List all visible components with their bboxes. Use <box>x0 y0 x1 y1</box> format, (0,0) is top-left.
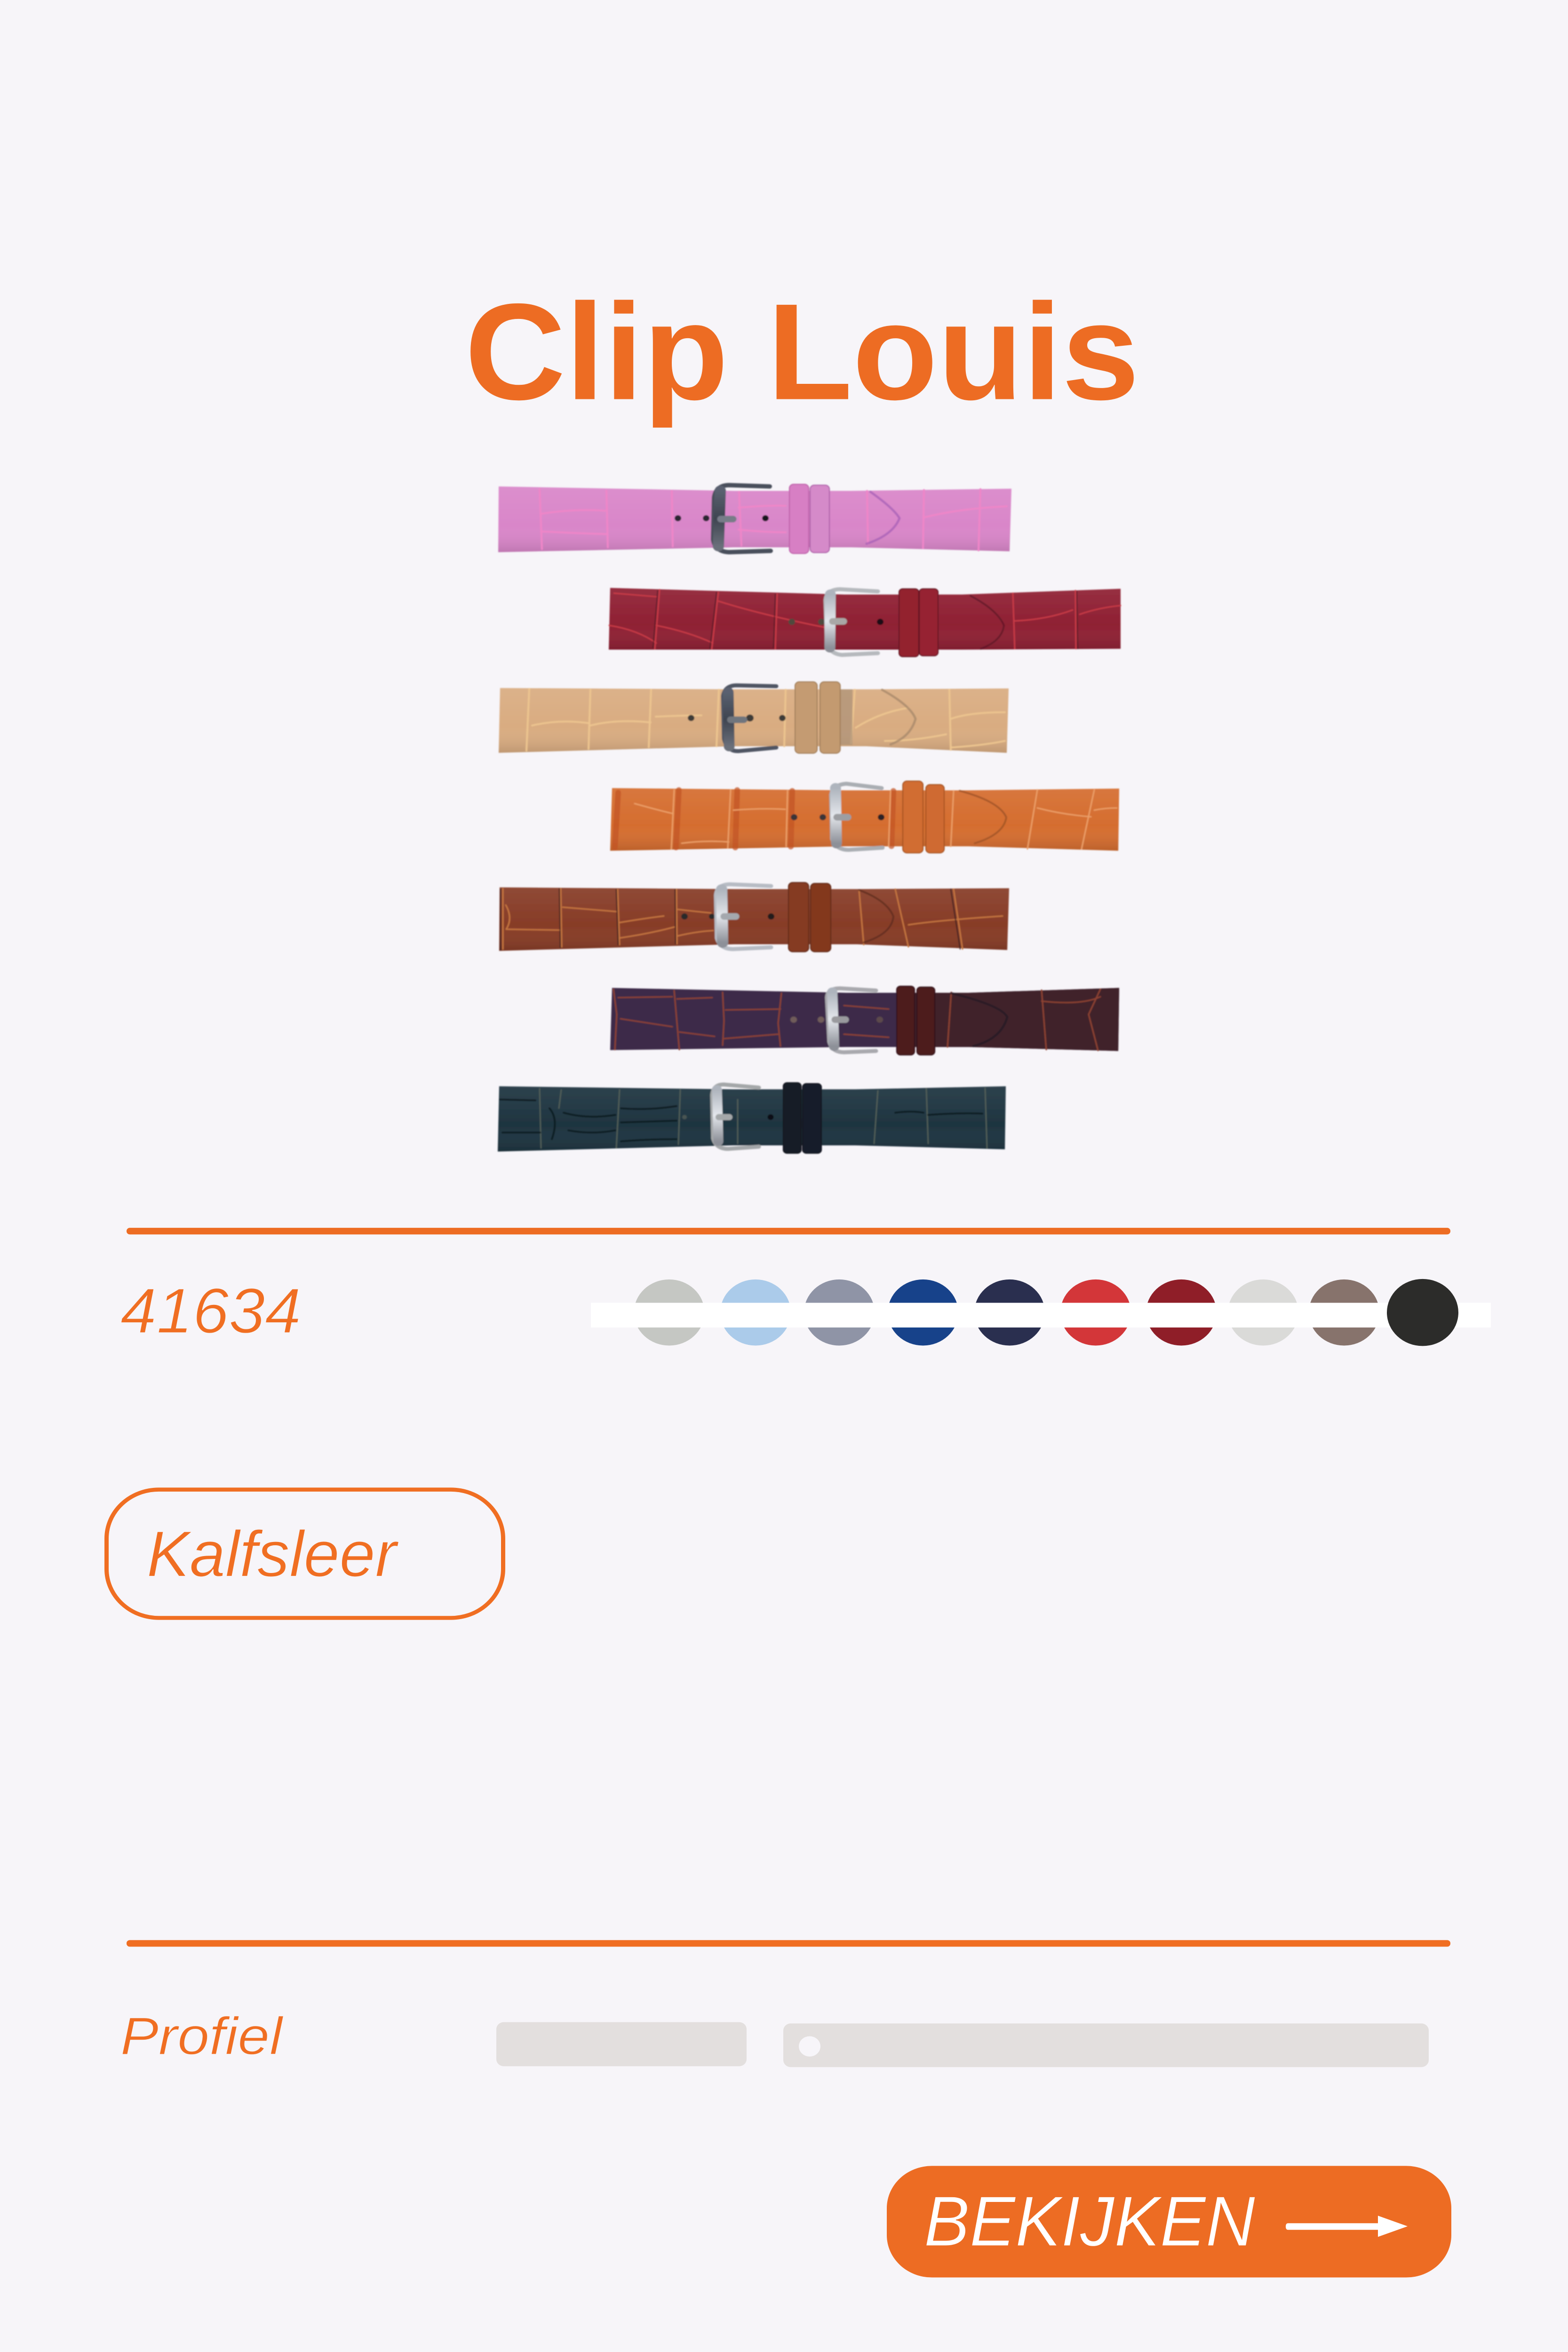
material tag: Kalfsleer <box>147 1518 399 1590</box>
title: Clip Louis <box>465 275 1139 429</box>
strap: pink <box>498 484 1011 554</box>
colour swatches <box>591 1279 1491 1346</box>
icon: arrow <box>1286 2216 1408 2237</box>
divider: bottom <box>127 1940 1450 1947</box>
profile label: Profiel <box>120 2007 284 2066</box>
straps group <box>498 484 1121 1153</box>
profile shape: long <box>783 2024 1429 2067</box>
strap: dark red <box>609 588 1121 657</box>
material tag <box>106 1490 503 1618</box>
strap: beige <box>499 682 1009 753</box>
divider: top <box>127 1228 1450 1234</box>
strap: chestnut brown <box>499 882 1009 952</box>
strap: black <box>498 1083 1006 1153</box>
article number: 41634 <box>120 1275 301 1346</box>
strap: orange <box>610 781 1119 853</box>
button: BEKIJKEN <box>924 2182 1255 2261</box>
profile shape: short <box>496 2022 747 2066</box>
button <box>887 2166 1451 2278</box>
strap: aubergine <box>610 986 1119 1055</box>
